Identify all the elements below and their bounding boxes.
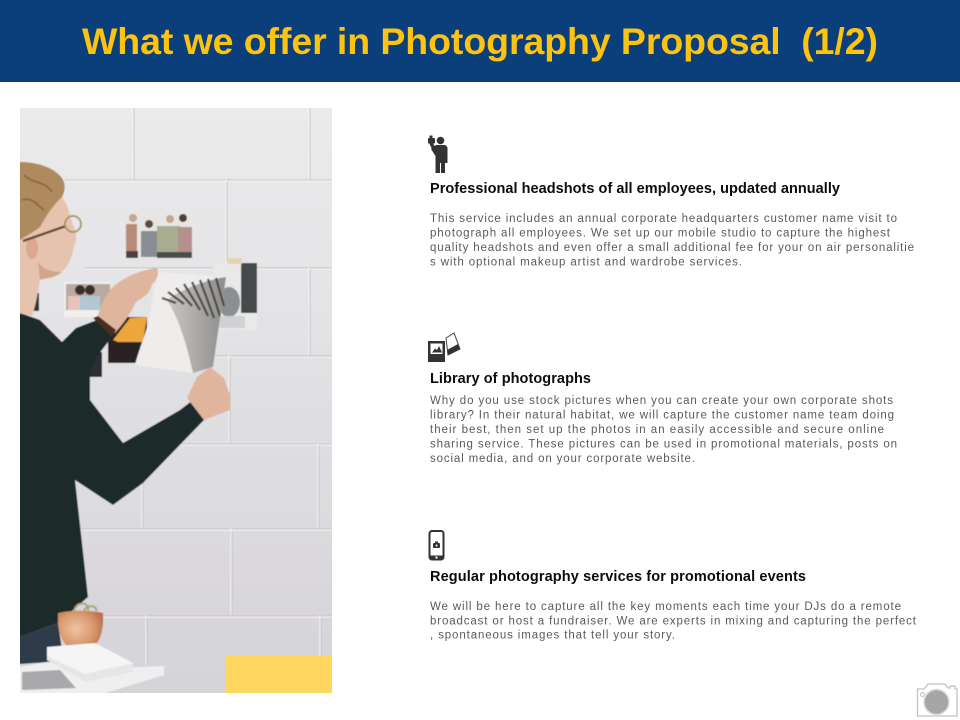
description: social media, and on your corporate website. [430, 453, 695, 465]
title: What we offer in Photography Proposal (1/2) [82, 20, 878, 62]
man: head and hair [20, 162, 82, 316]
icon: camera watermark [918, 684, 957, 716]
pinned print: couple [64, 282, 110, 317]
heading: Library of photographs [430, 371, 591, 387]
description: their best, then set up the photos in an easily accessible and secure online [430, 424, 884, 436]
description: Why do you use stock pictures when you can create your own corporate shots [430, 395, 893, 407]
watch [93, 316, 116, 337]
books [20, 642, 164, 693]
service 2: library [428, 333, 897, 465]
description: library? In their natural habitat, we will capture the customer name team doing [430, 410, 894, 422]
man: sweater [10, 310, 204, 640]
pinned print: sculpture portrait [213, 258, 257, 330]
description: This service includes an annual corporate headquarters customer name visit to [430, 213, 897, 225]
heading: Regular photography services for promotional events [430, 569, 806, 585]
description: broadcast or host a fundraiser. We are experts in mixing and capturing the perfect [430, 616, 917, 628]
description: s with optional makeup artist and wardrobe services. [430, 256, 742, 268]
service 3: promotional events [430, 531, 917, 642]
header banner [0, 0, 960, 82]
man: jeans [20, 622, 62, 664]
curved print in hands [135, 272, 226, 373]
pinned print: sunset [85, 317, 147, 377]
pinned print: small dark strip [32, 293, 39, 311]
description [430, 395, 897, 465]
yellow accent block [225, 656, 332, 693]
description: quality headshots and even offer a small additional fee for your on air personalitie [430, 242, 914, 254]
description: photograph all employees. We set up our mobile studio to capture the highest [430, 228, 891, 240]
description [430, 213, 914, 268]
hands [97, 268, 230, 420]
photo: man pinning prints on a brick wall [10, 100, 342, 701]
pinned print: four models [126, 214, 192, 258]
icon: smartphone with camera [430, 531, 444, 560]
icon: stacked photographs [428, 333, 460, 362]
description: sharing service. These pictures can be used in promotional materials, posts on [430, 438, 897, 450]
copper cup [58, 604, 103, 651]
description: We will be here to capture all the key moments each time your DJs do a remote [430, 601, 901, 613]
description [430, 601, 917, 642]
heading: Professional headshots of all employees, updated annually [430, 181, 840, 197]
icon: person holding camera [428, 136, 448, 173]
description: , spontaneous images that tell your story. [430, 630, 675, 642]
service 1: headshots [428, 136, 914, 268]
